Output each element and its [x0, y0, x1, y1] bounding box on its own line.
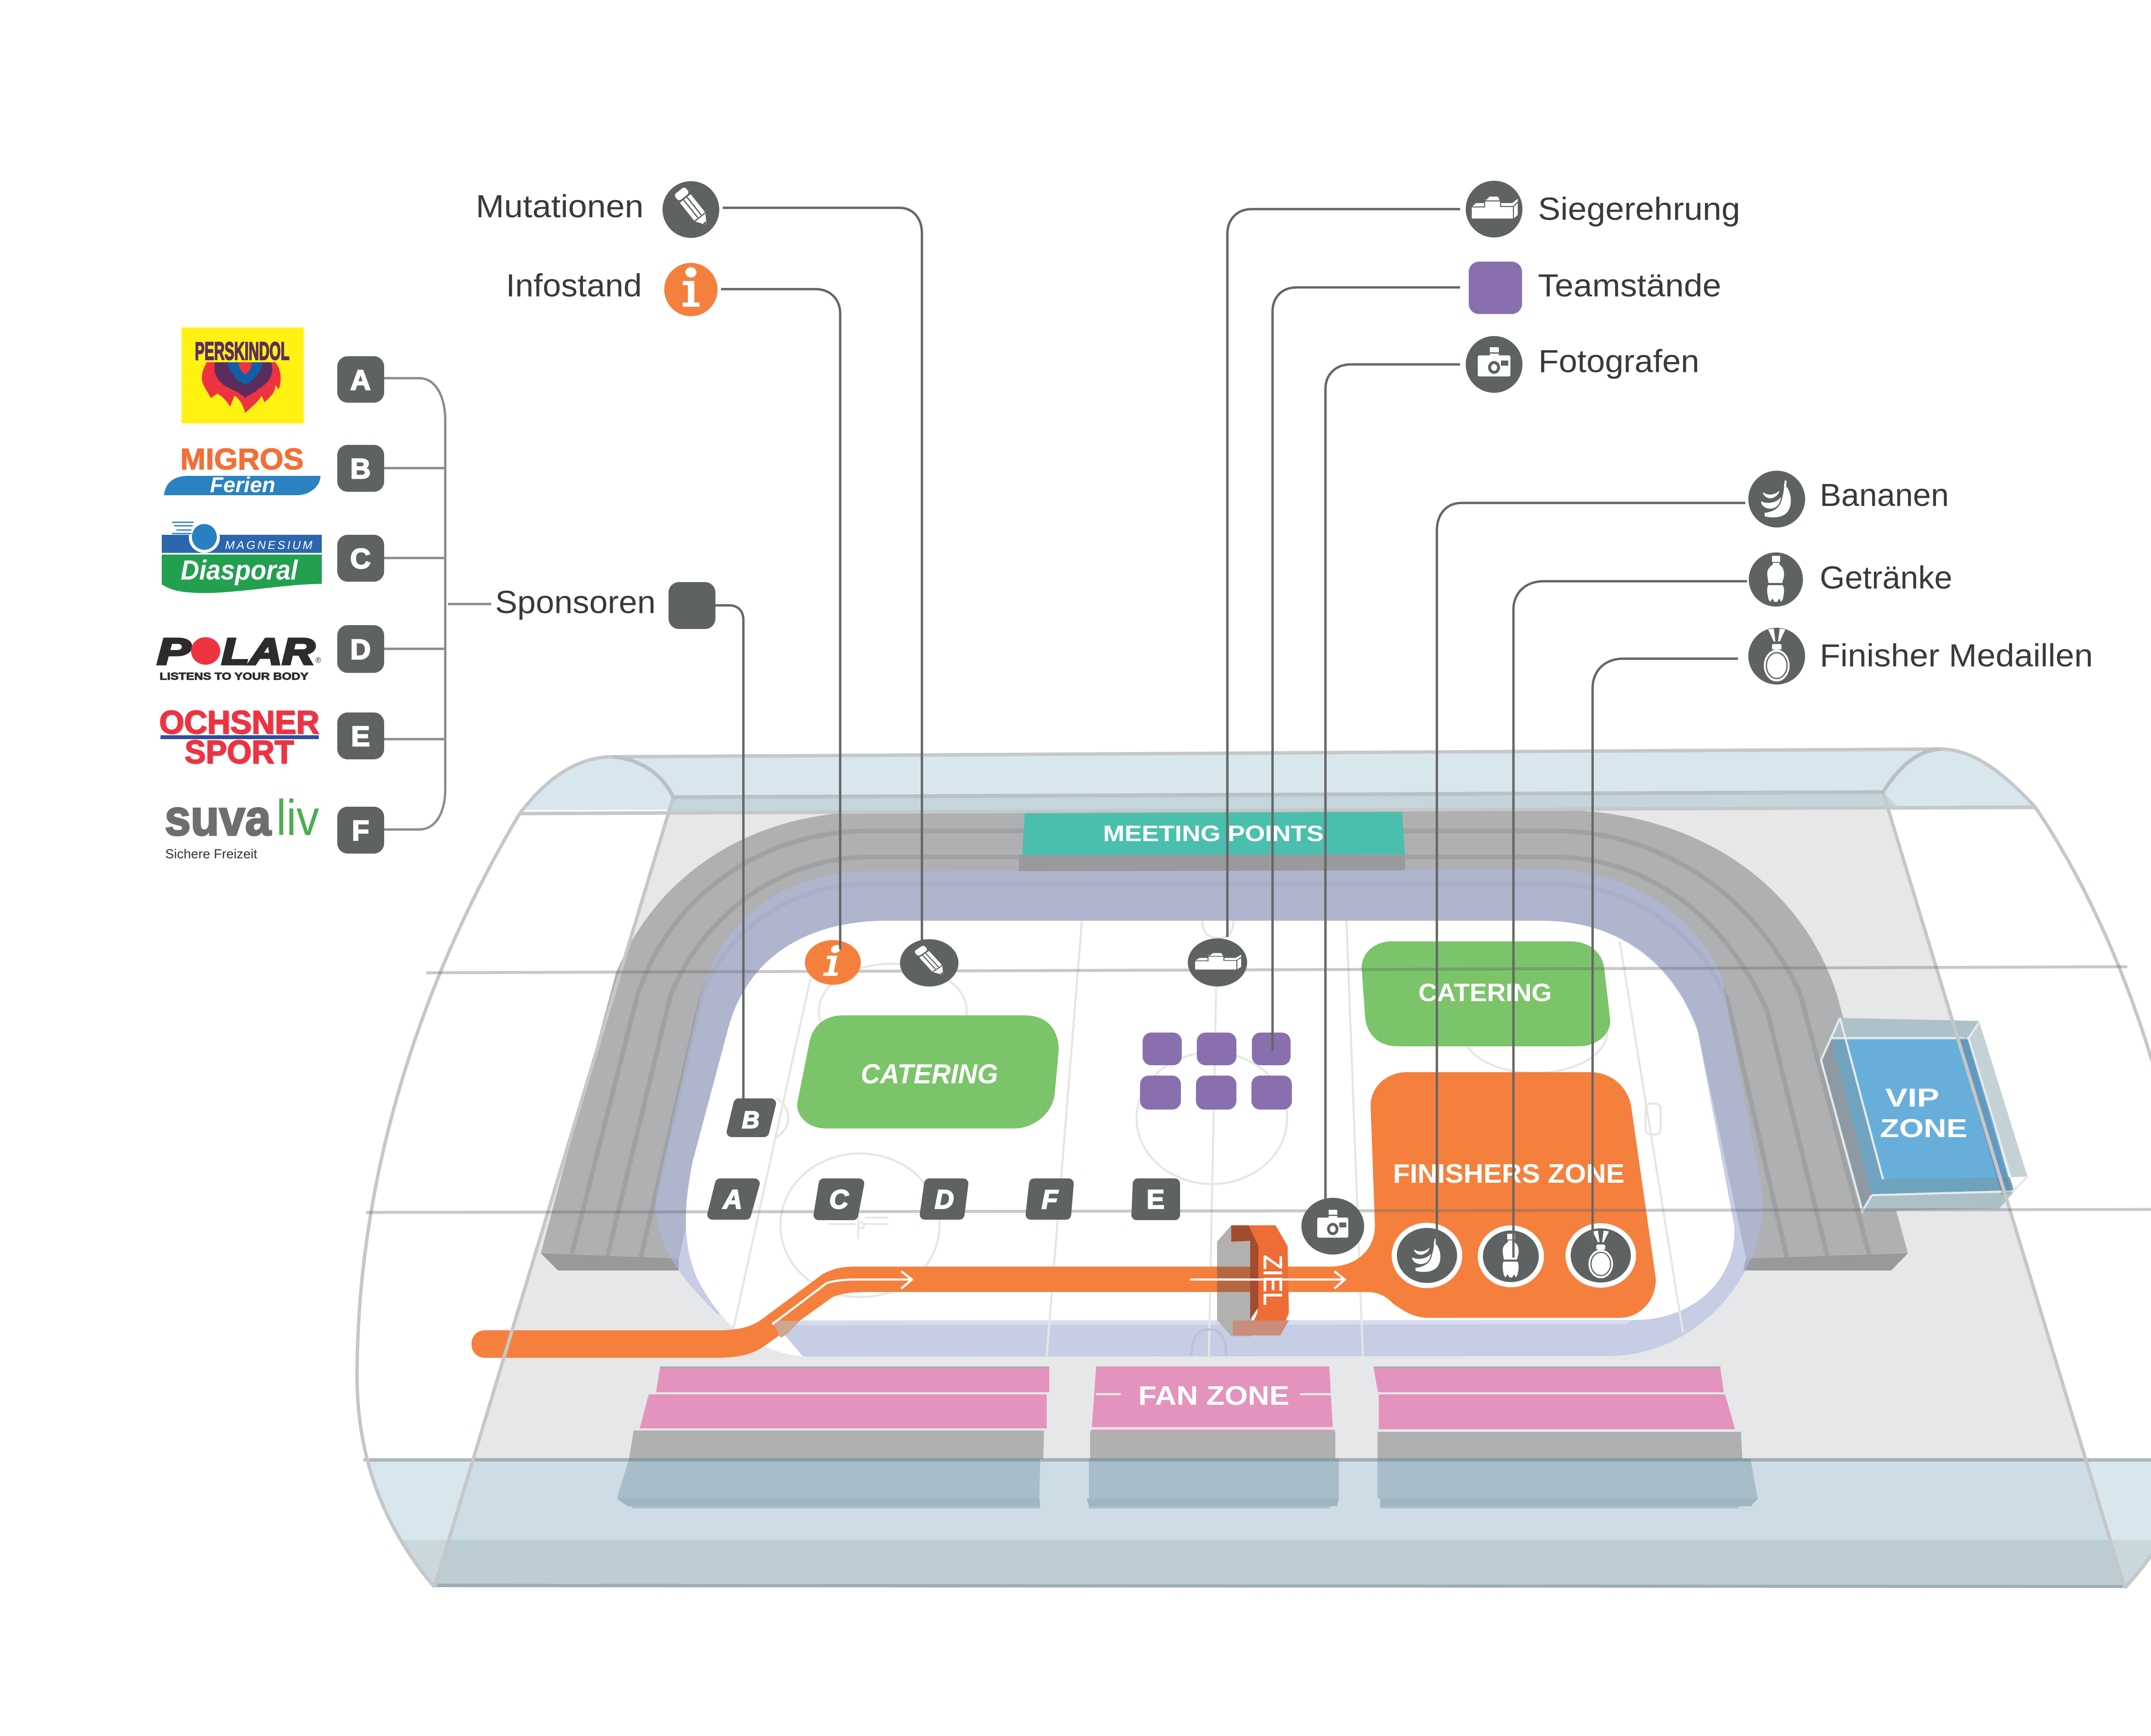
leader lines [715, 208, 1747, 1258]
sponsor badge A: A [350, 364, 371, 396]
legend: Mutationen [476, 181, 719, 238]
field icon: pencil [900, 939, 958, 987]
logo: Ochsner Sport: OCHSNER [160, 705, 320, 742]
finishers zone and route: FINISHERS ZONE [1393, 1159, 1624, 1189]
sponsor badge C [337, 535, 384, 582]
tunnel frame [357, 749, 2151, 1588]
VIP zone: VIP [1885, 1083, 1939, 1112]
logo: Migros Ferien: Ferien [210, 473, 275, 497]
badge A [712, 1184, 755, 1215]
field icon: info [805, 940, 861, 985]
glass bands outer [344, 744, 2151, 1596]
meeting points [1019, 812, 1405, 871]
sponsor badge A [337, 356, 384, 403]
lower glass floor [364, 1460, 2151, 1588]
legend: Sponsoren [448, 582, 715, 629]
sponsor badge F [337, 807, 384, 854]
legend: Bananen [1748, 471, 1949, 527]
legend: Infostand: Infostand [506, 268, 642, 303]
field icon: medal [1568, 1226, 1633, 1285]
glass back wall strip [667, 792, 1898, 814]
legend: Getränke [1749, 552, 1952, 607]
sponsor badge F: F [352, 814, 369, 846]
route arrow 2 [1190, 1271, 1345, 1289]
logo: Suva liv: suva [165, 789, 271, 846]
catering left: CATERING [861, 1058, 998, 1089]
sponsor badges on field [712, 1104, 1175, 1215]
badge C: C [829, 1185, 849, 1215]
logo: Ochsner Sport [159, 704, 320, 771]
legend: Teamstände [1469, 262, 1721, 314]
logo: Perskindol [182, 327, 304, 423]
catering right [1362, 941, 1610, 1046]
legend: Bananen: Bananen [1820, 477, 1949, 513]
sponsor bracket [384, 378, 445, 829]
sponsor badge E: E [351, 720, 370, 752]
logo: Suva liv: liv [276, 789, 319, 846]
badge F: F [1042, 1185, 1059, 1215]
legend: Finisher Medaillen [1748, 628, 2093, 685]
logo: Ochsner Sport: SPORT [185, 735, 295, 771]
field icon: camera [1301, 1198, 1364, 1255]
fan zone centre [1087, 1366, 1339, 1508]
logo: Diasporal: Diasporal [181, 555, 298, 586]
legend: Sponsoren: Sponsoren [495, 584, 656, 620]
badge E: E [1146, 1185, 1165, 1215]
badge D: D [935, 1185, 954, 1215]
barrier track [541, 810, 1908, 1270]
meeting points: MEETING POINTS [1103, 821, 1324, 846]
fan zone left [617, 1366, 1049, 1508]
legend: Fotografen [1466, 336, 1699, 393]
legend: Siegerehrung: Siegerehrung [1538, 191, 1740, 227]
finish gate: ZIEL [1258, 1255, 1287, 1305]
logo: Polar: ® [315, 656, 321, 665]
logo: Diasporal [162, 522, 322, 593]
logo: Migros Ferien [164, 442, 320, 497]
logo: Ochsner Sport: SPORT [185, 734, 294, 771]
finish gate [1217, 1225, 1289, 1336]
catering right: CATERING [1418, 979, 1552, 1007]
logo: Suva liv [165, 789, 319, 861]
floor [435, 792, 2125, 1588]
logo: Polar: LISTENS TO YOUR BODY [160, 671, 308, 682]
field icon: banana [1394, 1225, 1460, 1286]
field plan lines [733, 921, 1683, 1356]
sponsor badge D [337, 625, 384, 673]
catering left [797, 1015, 1059, 1129]
logo: Suva liv: Sichere Freizeit [165, 846, 257, 861]
logo: Ochsner Sport: OCHSNER [159, 704, 319, 741]
sponsor badge B [337, 445, 384, 492]
badge E [1137, 1184, 1175, 1215]
team stands [1140, 1033, 1292, 1110]
VIP zone: ZONE [1880, 1114, 1967, 1143]
logo: Polar: P [157, 631, 191, 672]
field icon: podium [1188, 938, 1247, 987]
badge A: A [722, 1185, 742, 1215]
finishers zone and route [471, 1072, 1656, 1358]
route arrow 1 [772, 1271, 912, 1324]
sponsor badge E [337, 712, 384, 759]
badge B: B [742, 1106, 759, 1133]
badge C [819, 1184, 859, 1215]
lavender front highlight [773, 1320, 1632, 1325]
badge F [1031, 1184, 1069, 1215]
legend: Mutationen: Mutationen [476, 188, 644, 224]
field icon: bottle [1480, 1228, 1541, 1285]
tunnel outline [357, 749, 2151, 1588]
logo: Diasporal: MAGNESIUM [225, 539, 312, 552]
logo: Perskindol: PERSKINDOL [195, 337, 290, 365]
lavender ring around field [656, 869, 1763, 1357]
logo: Polar: LAR [222, 631, 315, 672]
logo: Migros Ferien: MIGROS [180, 442, 304, 476]
legend: Siegerehrung [1466, 181, 1740, 237]
legend: Fotografen: Fotografen [1538, 343, 1699, 379]
fan zone right [1374, 1366, 1758, 1508]
sponsor badge D: D [350, 633, 371, 665]
badge B [732, 1104, 771, 1133]
logo: Polar [157, 631, 321, 682]
fan zone centre: FAN ZONE [1138, 1381, 1289, 1411]
VIP zone [1821, 1018, 2028, 1211]
white field [686, 921, 1735, 1357]
legend: Infostand [506, 263, 718, 316]
badge D [925, 1184, 963, 1215]
legend: Finisher Medaillen: Finisher Medaillen [1820, 638, 2093, 673]
legend: Teamstände: Teamstände [1538, 268, 1721, 303]
sponsor badge C: C [350, 543, 371, 574]
legend: Getränke: Getränke [1820, 560, 1952, 595]
sponsor badge B: B [350, 453, 371, 484]
